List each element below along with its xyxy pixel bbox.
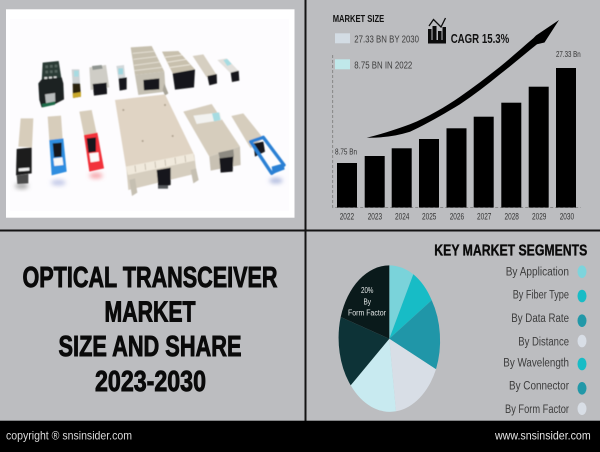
segment colour dots [578, 265, 586, 415]
segment labels: By Connector [509, 381, 569, 393]
segment labels [503, 266, 569, 416]
icon: growth chart [428, 18, 446, 44]
title: 2023-2030 [95, 366, 206, 398]
legend: 2030 value: 27.33 BN BY 2030 [354, 35, 419, 46]
bar value labels [335, 50, 581, 157]
footer website: www.snsinsider.com [494, 428, 591, 442]
pie chart: key market segments [339, 265, 440, 412]
footer bar [0, 421, 600, 452]
legend: 2022 value [335, 59, 413, 72]
bar value labels: 8.75 Bn [335, 148, 357, 157]
segment labels: By Application [506, 266, 569, 278]
year axis labels: 2025 [422, 211, 436, 221]
year axis labels: 2022 [340, 211, 354, 221]
pie slice label: By [364, 298, 371, 306]
CAGR label: CAGR 15.3% [451, 32, 509, 46]
panel: market size bar chart [333, 14, 581, 221]
segment labels: By Data Rate [511, 313, 569, 325]
bar value labels: 27.33 Bn [556, 50, 581, 59]
year axis labels: 2029 [532, 211, 546, 221]
title: OPTICAL TRANSCEIVER [22, 262, 278, 294]
legend: 2022 value: 8.75 BN IN 2022 [354, 61, 413, 72]
year axis labels: 2023 [368, 211, 382, 221]
year axis labels: 2028 [504, 211, 519, 221]
title: MARKET [104, 296, 196, 328]
transceiver modules photo [15, 46, 285, 196]
pie slice label: Form Factor [348, 308, 386, 318]
panel: key market segments legend [434, 242, 588, 416]
growth arrow [367, 20, 559, 138]
title [22, 262, 278, 398]
segment labels: By Fiber Type [513, 290, 569, 302]
chart heading: market size: MARKET SIZE [333, 14, 384, 25]
panel: product photo of optical transceivers [6, 9, 294, 218]
year axis labels [340, 211, 574, 221]
pie slice label [348, 286, 386, 318]
segment labels: By Form Factor [505, 404, 569, 416]
segment labels: By Wavelength [503, 357, 569, 369]
pie slice label: 20% [361, 286, 373, 295]
year axis labels: 2027 [477, 211, 491, 221]
bars [337, 68, 576, 208]
title: SIZE AND SHARE [58, 331, 242, 363]
segment labels: By Distance [518, 336, 569, 348]
footer copyright: copyright ® snsinsider.com [6, 428, 132, 442]
legend: 2030 value [335, 33, 419, 46]
chart axes [333, 55, 581, 208]
year axis labels: 2030 [560, 211, 574, 221]
year axis labels: 2026 [450, 211, 464, 221]
year axis labels: 2024 [395, 211, 409, 221]
